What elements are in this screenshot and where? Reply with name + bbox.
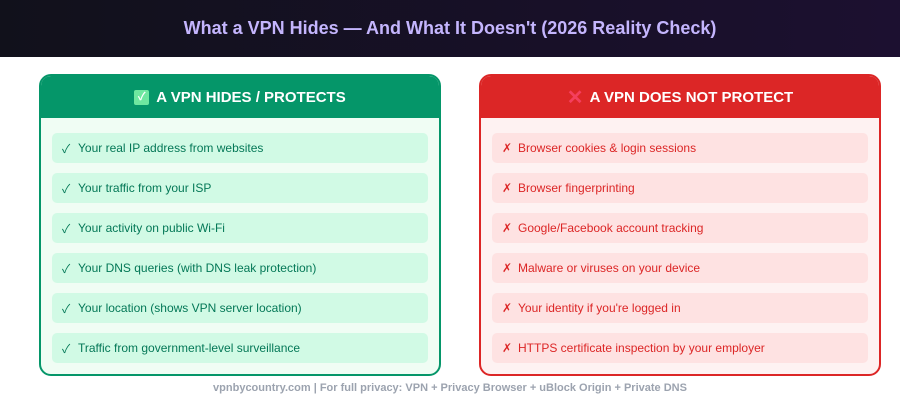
heading: does not protect <box>481 76 879 118</box>
heading: hides <box>41 76 439 118</box>
list: hides: Your activity on public Wi-Fi <box>78 221 225 235</box>
list: hides: ✓ <box>62 342 70 356</box>
list: hides: Your DNS queries (with DNS leak protection) <box>78 261 316 275</box>
title <box>0 0 900 57</box>
list: does not protect: Your identity if you're logged in <box>518 301 681 315</box>
list: hides: ✓ <box>62 302 70 316</box>
list: does not protect: ✗ <box>502 221 512 235</box>
heading: does not protect: ✕ <box>567 86 584 108</box>
list: hides: ✓ <box>62 262 70 276</box>
list: does not protect <box>492 133 868 363</box>
heading: hides: ✓ <box>138 90 146 102</box>
list: hides: ✓ <box>62 142 70 156</box>
list: hides: ✓ <box>62 182 70 196</box>
list: hides: Traffic from government-level surveillance <box>78 341 300 355</box>
list: does not protect: Google/Facebook account tracking <box>518 221 703 235</box>
list: does not protect: Malware or viruses on your device <box>518 261 700 275</box>
list: does not protect: ✗ <box>502 261 512 275</box>
list: does not protect: Browser fingerprinting <box>518 181 635 195</box>
list: hides <box>52 133 428 363</box>
list: does not protect: HTTPS certificate inspection by your employer <box>518 341 765 355</box>
list: hides: Your location (shows VPN server location) <box>78 301 302 315</box>
list: hides: Your real IP address from websites <box>78 141 263 155</box>
footer: vpnbycountry.com | For full privacy: VPN + Privacy Browser + uBlock Origin + Private DNS <box>213 382 687 394</box>
list: does not protect: ✗ <box>502 341 512 355</box>
heading: does not protect: A VPN DOES NOT PROTECT <box>590 88 793 106</box>
list: hides: ✓ <box>62 222 70 236</box>
panel: does not protect <box>479 74 881 376</box>
title: What a VPN Hides — And What It Doesn't (2026 Reality Check) <box>184 18 716 38</box>
list: hides: Your traffic from your ISP <box>78 181 211 195</box>
list: does not protect: ✗ <box>502 141 512 155</box>
list: does not protect: ✗ <box>502 301 512 315</box>
heading: hides: A VPN HIDES / PROTECTS <box>156 88 346 106</box>
panel: hides <box>39 74 441 376</box>
list: does not protect: ✗ <box>502 181 512 195</box>
list: does not protect: Browser cookies & login sessions <box>518 141 696 155</box>
